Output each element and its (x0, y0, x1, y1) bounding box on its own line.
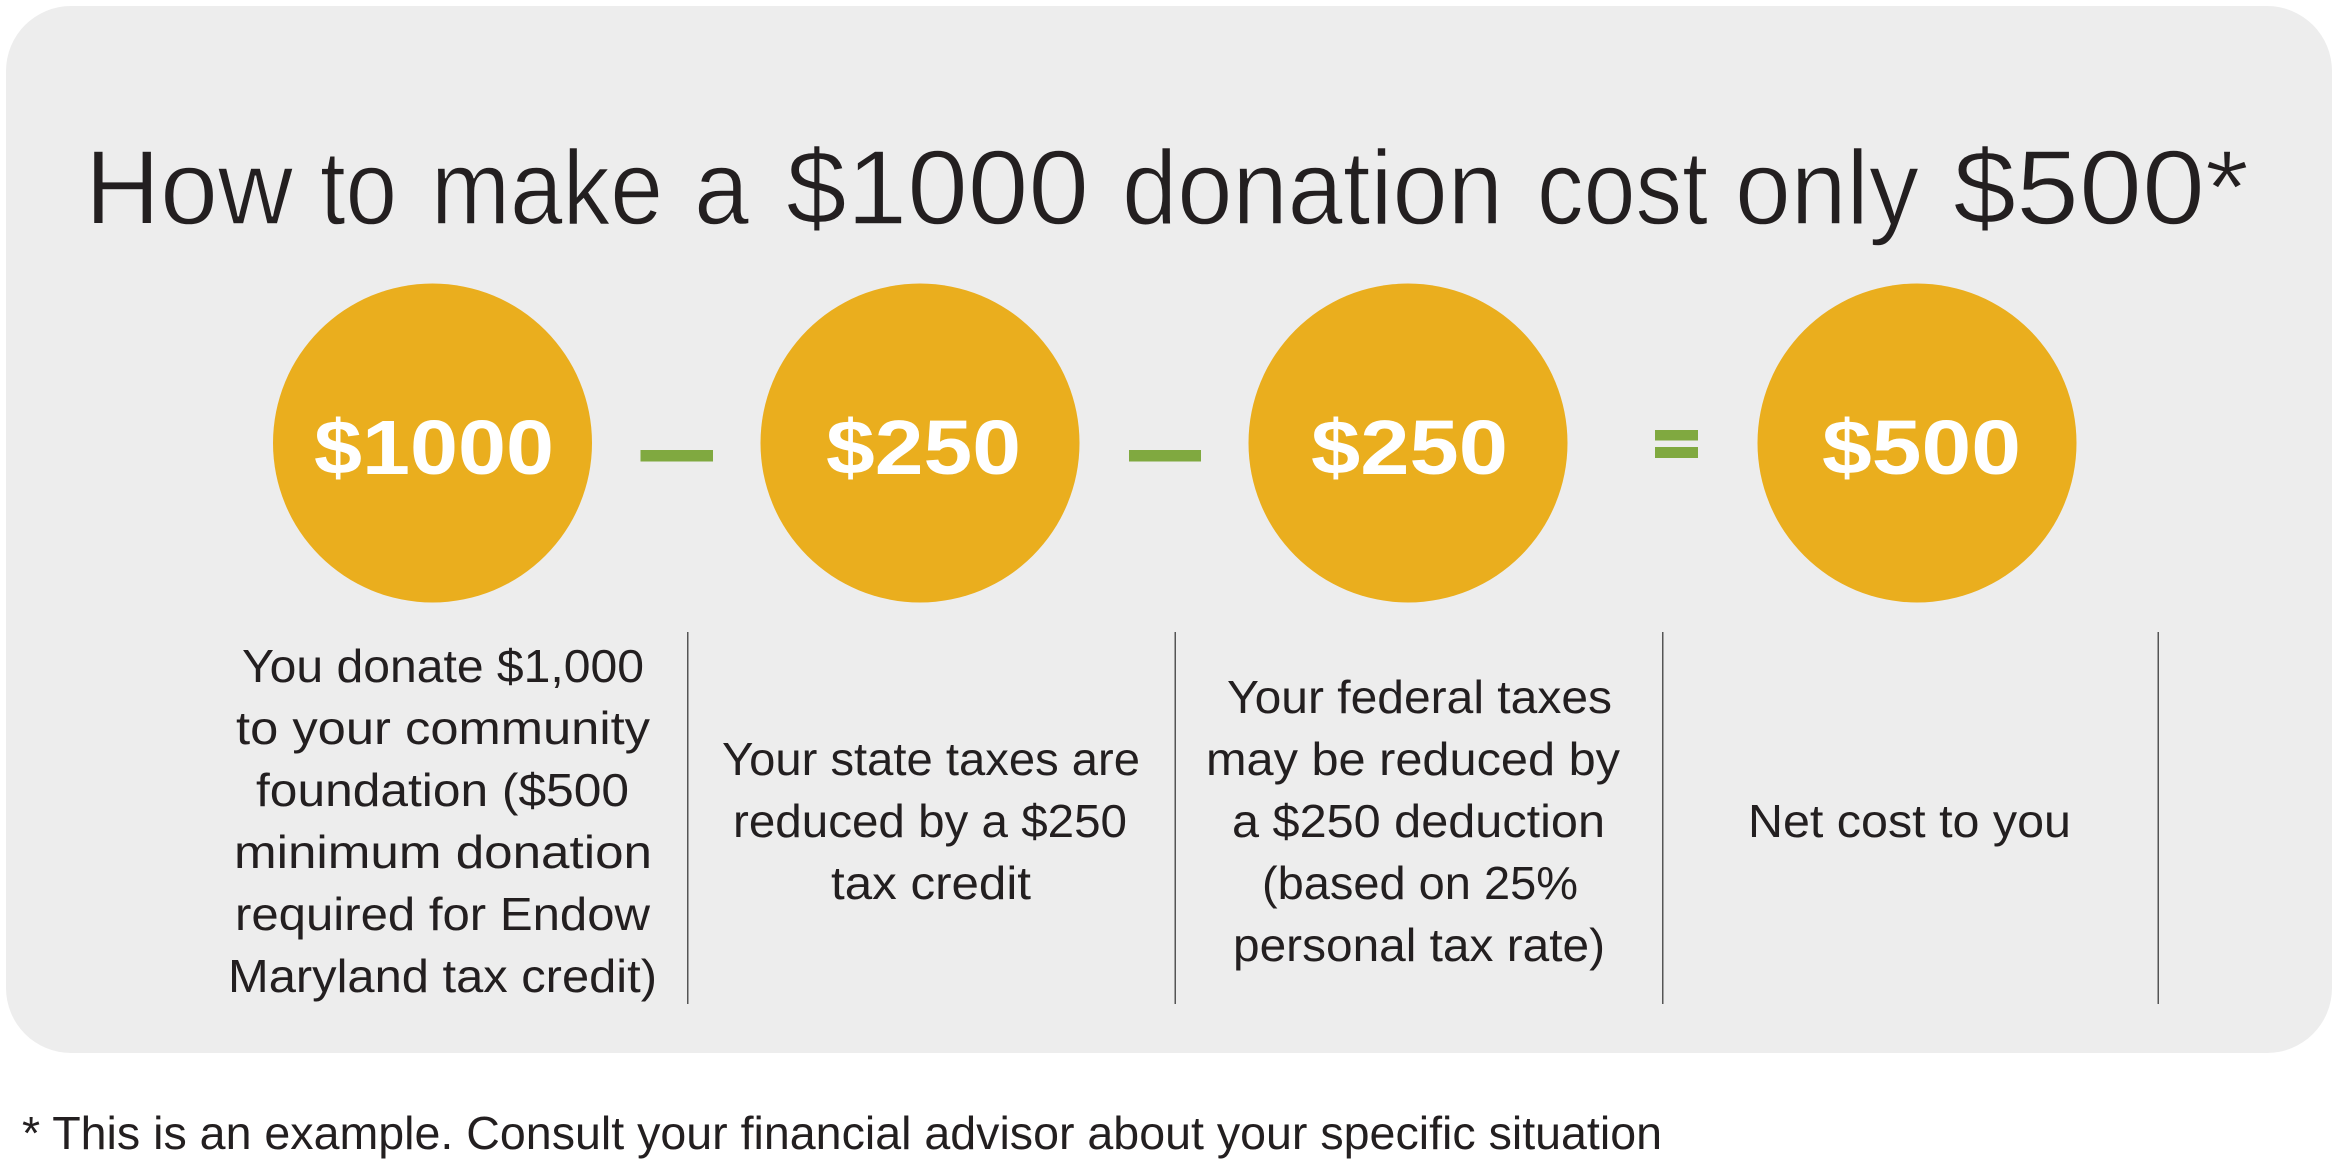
text block: you donate: You donate $1,000 (242, 640, 644, 692)
circle: $250 state credit: $250 (826, 405, 1021, 491)
circle: $250 federal deduction: $250 (1311, 405, 1508, 491)
text block: federal taxes: may be reduced by (1206, 733, 1620, 785)
text block: state taxes: reduced by a $250 (733, 795, 1127, 847)
text block: you donate: Maryland tax credit) (228, 950, 657, 1002)
text block: federal taxes: personal tax rate) (1233, 919, 1605, 971)
circle: $500 net cost: $500 (1822, 405, 2021, 491)
title: How (85, 129, 293, 247)
divider (1174, 632, 1176, 1004)
operator: minus (1129, 450, 1201, 462)
divider (1662, 632, 1664, 1004)
text block: federal taxes: Your federal taxes (1227, 671, 1612, 723)
text block: federal taxes: (based on 25% (1262, 857, 1578, 909)
title: $1000 (786, 129, 1089, 247)
text block: federal taxes (1206, 671, 1620, 971)
text block: you donate: to your community (236, 702, 650, 754)
text block: state taxes: tax credit (831, 857, 1031, 909)
text block: you donate: minimum donation (234, 826, 652, 878)
circle: $250 federal deduction (1248, 284, 1568, 602)
title: only (1735, 129, 1919, 247)
divider (2158, 632, 2159, 1004)
title: cost (1537, 129, 1708, 247)
text block: you donate: required for Endow (235, 888, 651, 940)
circle: $1000: $1000 (314, 405, 554, 491)
text block: net cost: Net cost to you (1748, 795, 2071, 847)
text block: you donate: foundation ($500 (256, 764, 629, 816)
circle: $250 state credit (760, 284, 1080, 602)
operator: equals (1655, 430, 1698, 458)
title: make (431, 129, 663, 247)
text block: federal taxes: a $250 deduction (1232, 795, 1605, 847)
text block: you donate (228, 640, 657, 1002)
divider (687, 632, 688, 1004)
title: a (694, 129, 749, 247)
footnote: * This is an example. Consult your financial advisor about your specific situation (22, 1107, 1662, 1159)
title (85, 129, 2249, 247)
title: to (320, 129, 397, 247)
title: donation (1122, 129, 1503, 247)
title: $500* (1953, 129, 2249, 247)
circle: $1000 (273, 284, 592, 602)
operator: minus (640, 450, 713, 462)
text block: state taxes: Your state taxes are (722, 733, 1140, 785)
text block: state taxes (722, 733, 1140, 909)
circle: $500 net cost (1758, 284, 2076, 602)
